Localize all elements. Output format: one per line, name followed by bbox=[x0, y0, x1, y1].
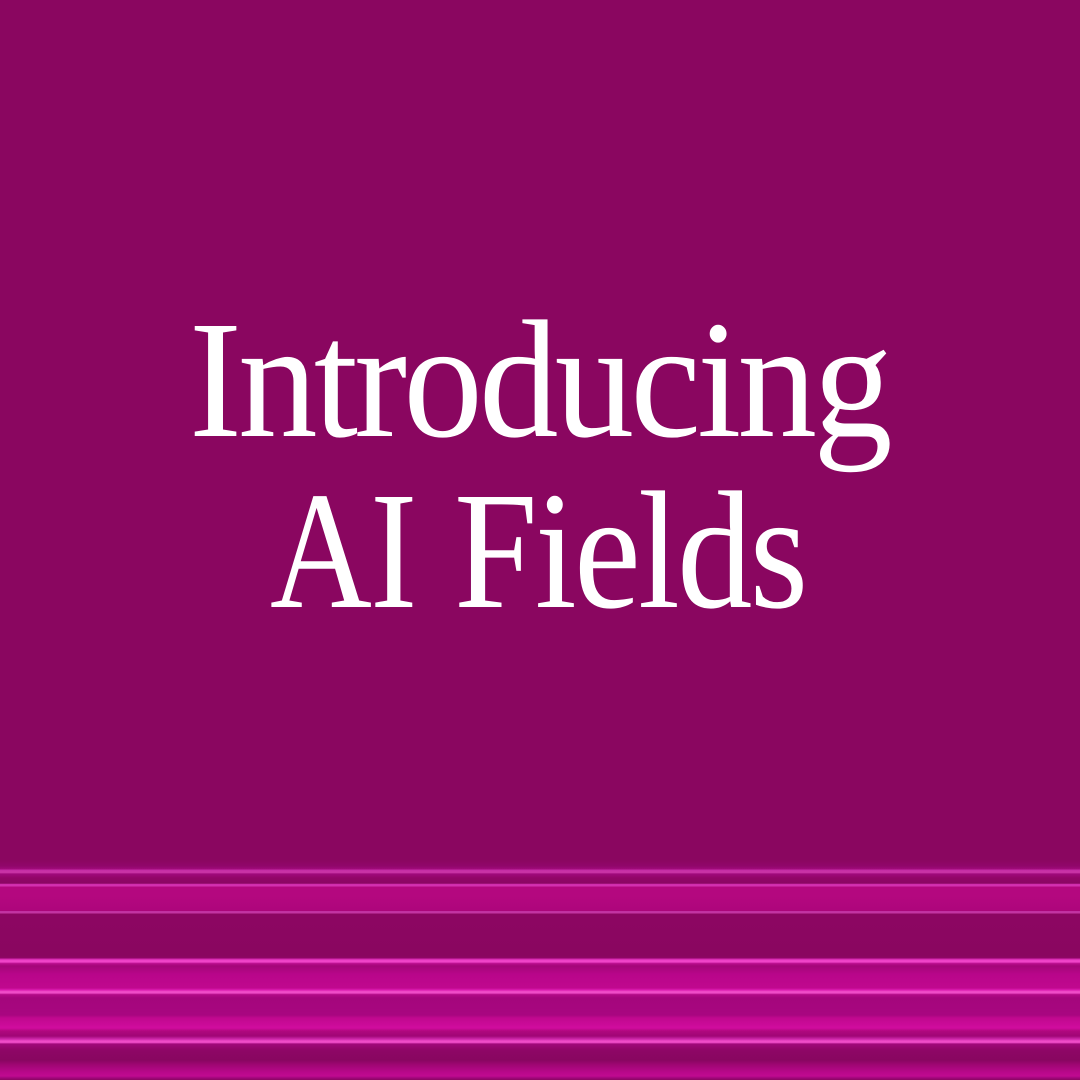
heading word: Fields: Fields bbox=[454, 458, 805, 644]
heading word: AI: AI bbox=[270, 458, 416, 644]
decorative stripe band bbox=[0, 860, 1080, 1080]
title bbox=[189, 287, 890, 644]
heading line: Introducing: Introducing bbox=[189, 287, 889, 473]
